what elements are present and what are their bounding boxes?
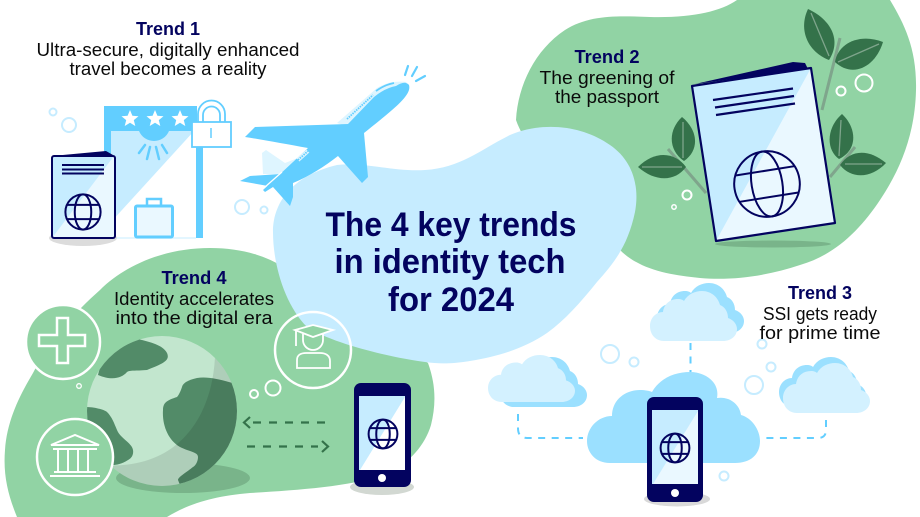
- heading: trend 4: into the digital era: [116, 308, 274, 328]
- heading: trend 4: [114, 268, 274, 328]
- heading: trend 4: Trend 4: [162, 268, 226, 288]
- icon: medical cross badge: [26, 305, 100, 379]
- heading: trend 1: [36, 19, 300, 79]
- icon: hotel building: [104, 106, 203, 238]
- icon: large passport: [692, 62, 835, 248]
- heading: trend 2: [540, 47, 676, 107]
- decorative bubbles: trend 3: [601, 340, 776, 480]
- arrows: data exchange: [244, 417, 328, 452]
- decorative bubbles: trend 2: [672, 74, 872, 209]
- icon: phone, trend 3: [644, 397, 710, 506]
- heading: trend 3: for prime time: [760, 323, 880, 343]
- heading: trend 1: travel becomes a reality: [70, 59, 266, 79]
- title: in identity tech: [334, 243, 566, 281]
- heading: trend 1: Ultra-secure, digitally enhanced: [36, 40, 300, 60]
- title: for 2024: [388, 281, 514, 319]
- icon: airplane: [240, 66, 425, 206]
- icon: leaves and stems: [638, 9, 886, 193]
- icon: phone, trend 4: [350, 383, 414, 495]
- title: The 4 key trends: [326, 206, 576, 244]
- icon: small passport: [49, 151, 117, 246]
- heading: trend 4: Identity accelerates: [114, 289, 274, 309]
- icon: suitcase: [136, 199, 172, 237]
- dashed connectors: trend 3: [518, 343, 826, 438]
- icon: padlock: [192, 101, 231, 147]
- icon: earth globe: [85, 336, 250, 500]
- decorative bubble: small: [77, 384, 81, 388]
- green blob: trend 2 background: [516, 0, 916, 279]
- heading: trend 1: Trend 1: [136, 19, 200, 39]
- heading: trend 3: [760, 283, 880, 343]
- icon: bank badge: [37, 419, 113, 495]
- decorative bubbles: thought trail: [250, 380, 280, 398]
- decorative bubbles: trend 1: [50, 108, 268, 214]
- light blue blob: title background: [273, 127, 636, 363]
- heading: trend 2: The greening of: [540, 68, 676, 88]
- heading: trend 3: SSI gets ready: [763, 304, 877, 324]
- heading: trend 2: the passport: [555, 87, 659, 107]
- title: [326, 206, 576, 319]
- clouds: trend 3: [488, 283, 870, 463]
- heading: trend 3: Trend 3: [788, 283, 852, 303]
- green blob: trend 4 background: [5, 248, 434, 517]
- heading: trend 2: Trend 2: [574, 47, 640, 67]
- icon: graduate badge: [275, 312, 351, 388]
